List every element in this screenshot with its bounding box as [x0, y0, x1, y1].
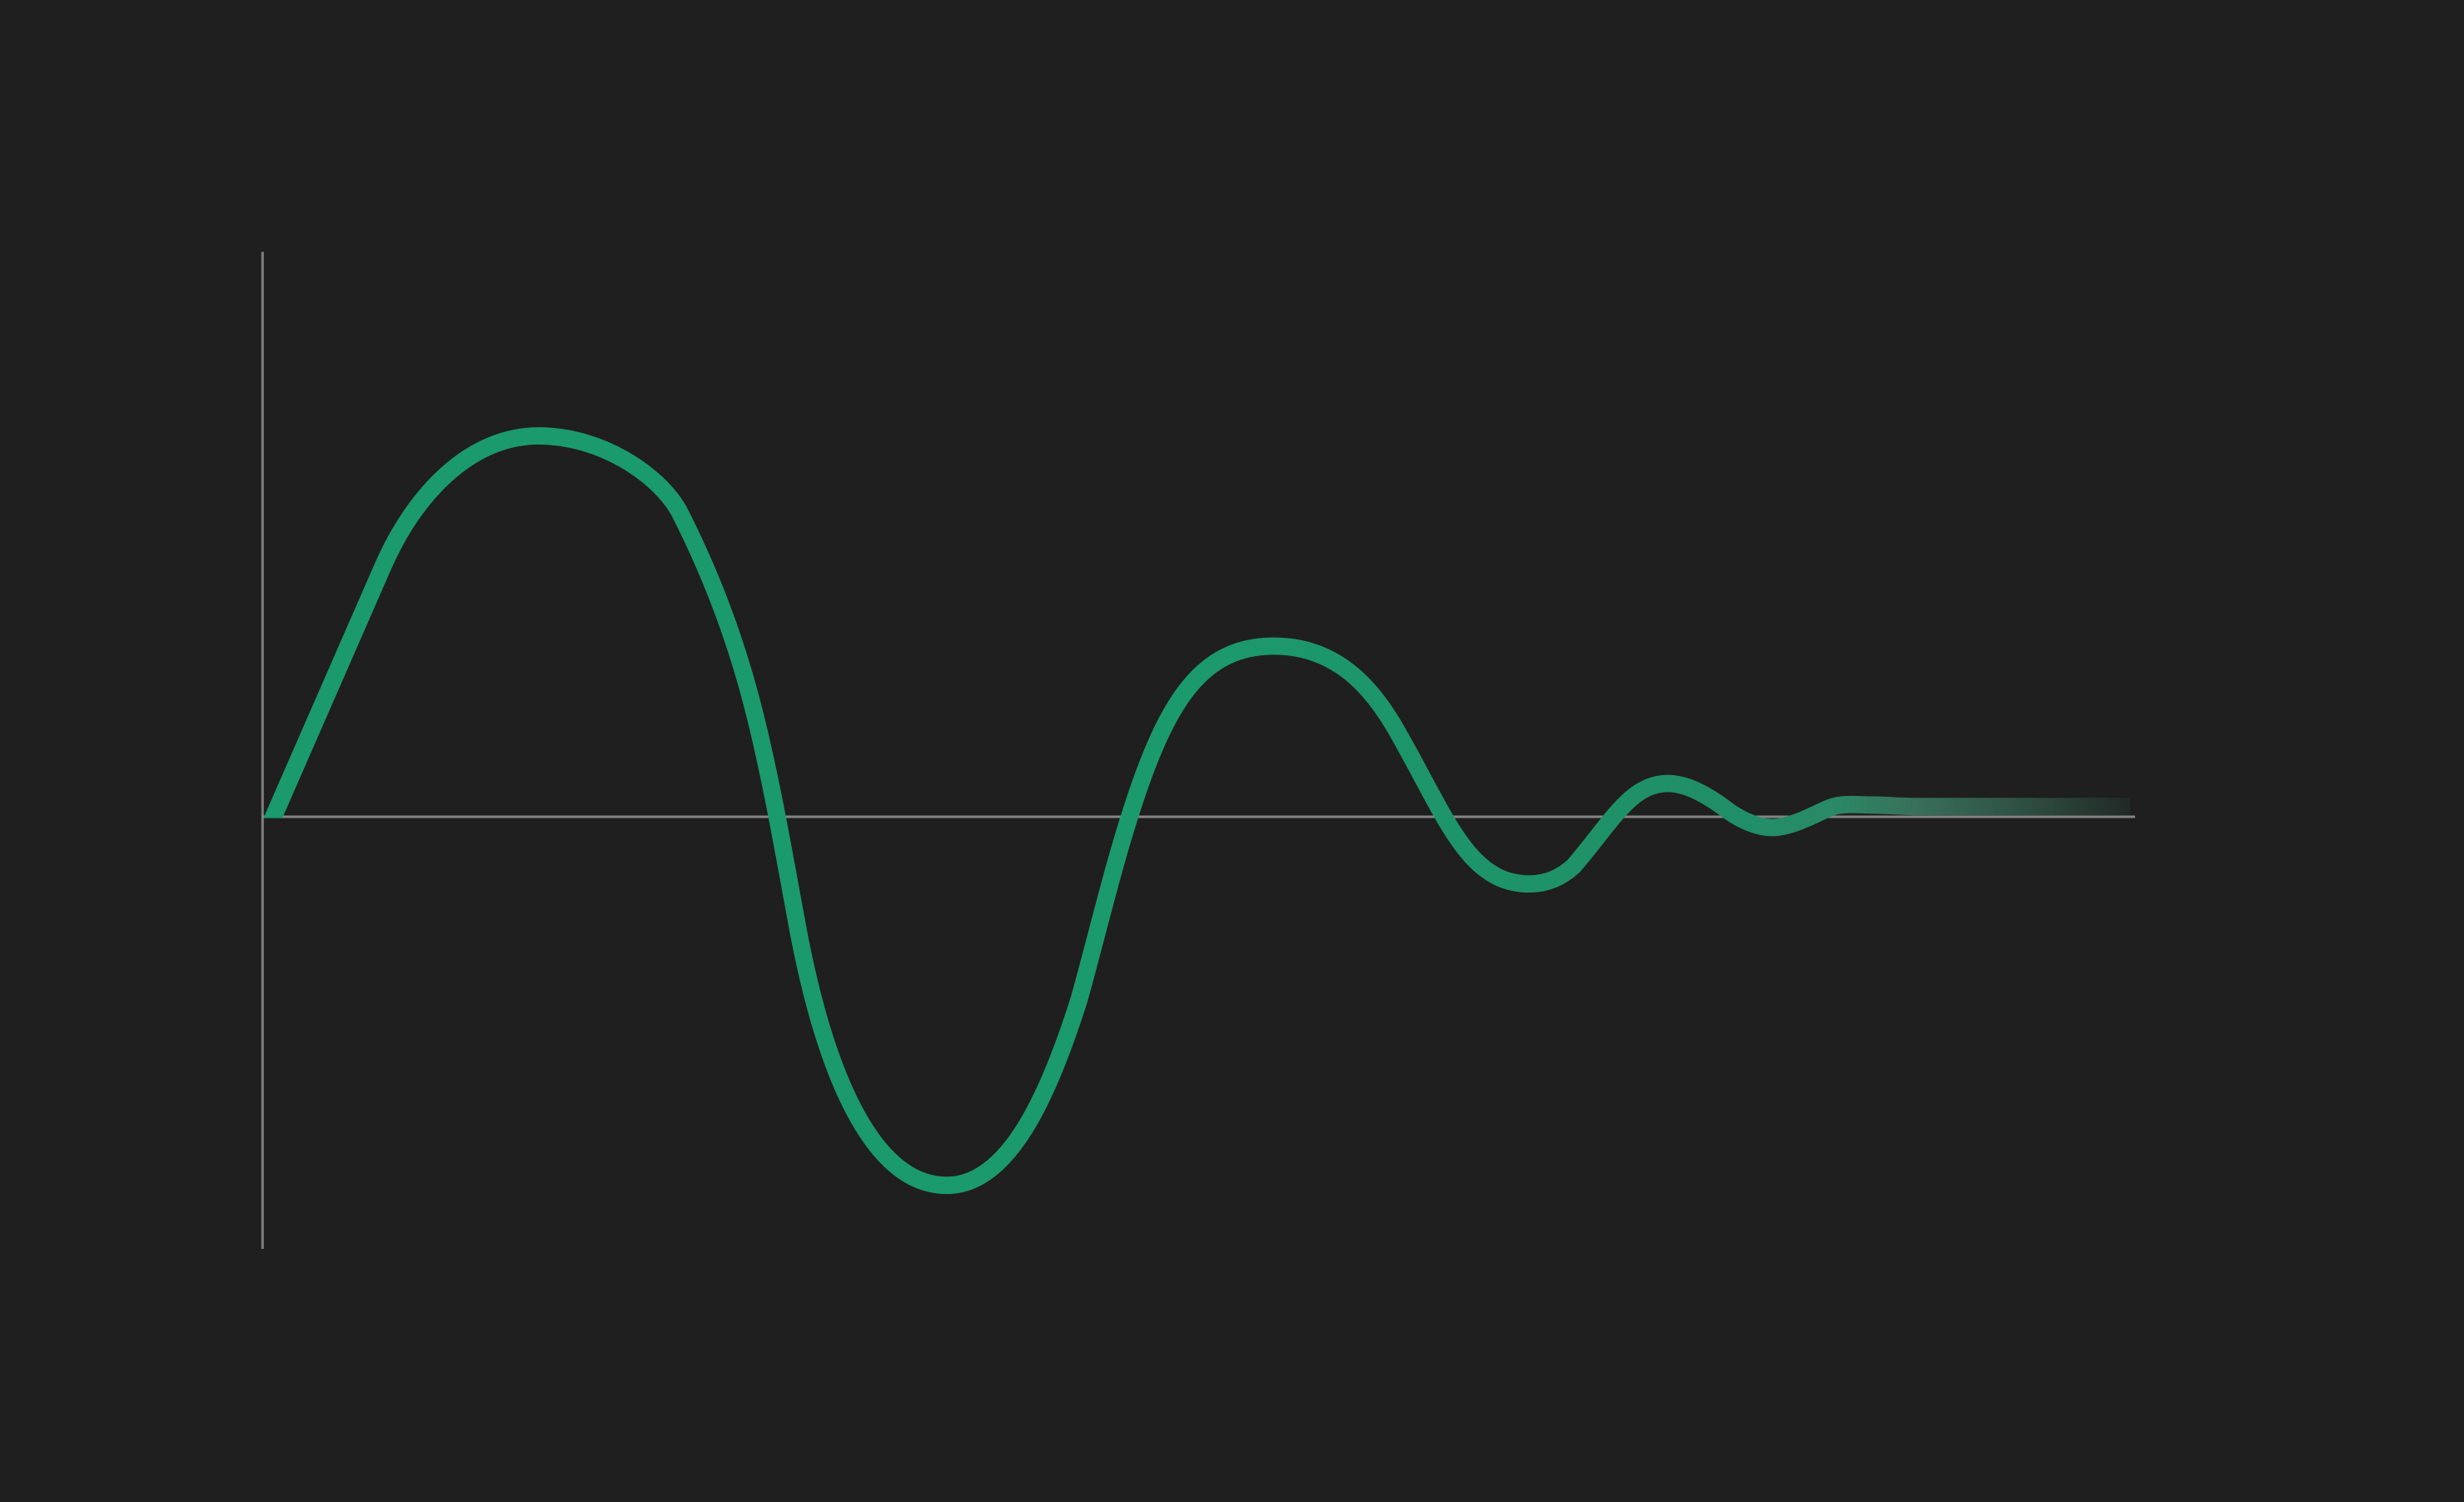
chart: damped oscillation [261, 251, 2135, 1249]
damped wave curve [270, 436, 2130, 1186]
horizontal axis [261, 816, 2135, 818]
vertical axis [261, 251, 264, 1249]
